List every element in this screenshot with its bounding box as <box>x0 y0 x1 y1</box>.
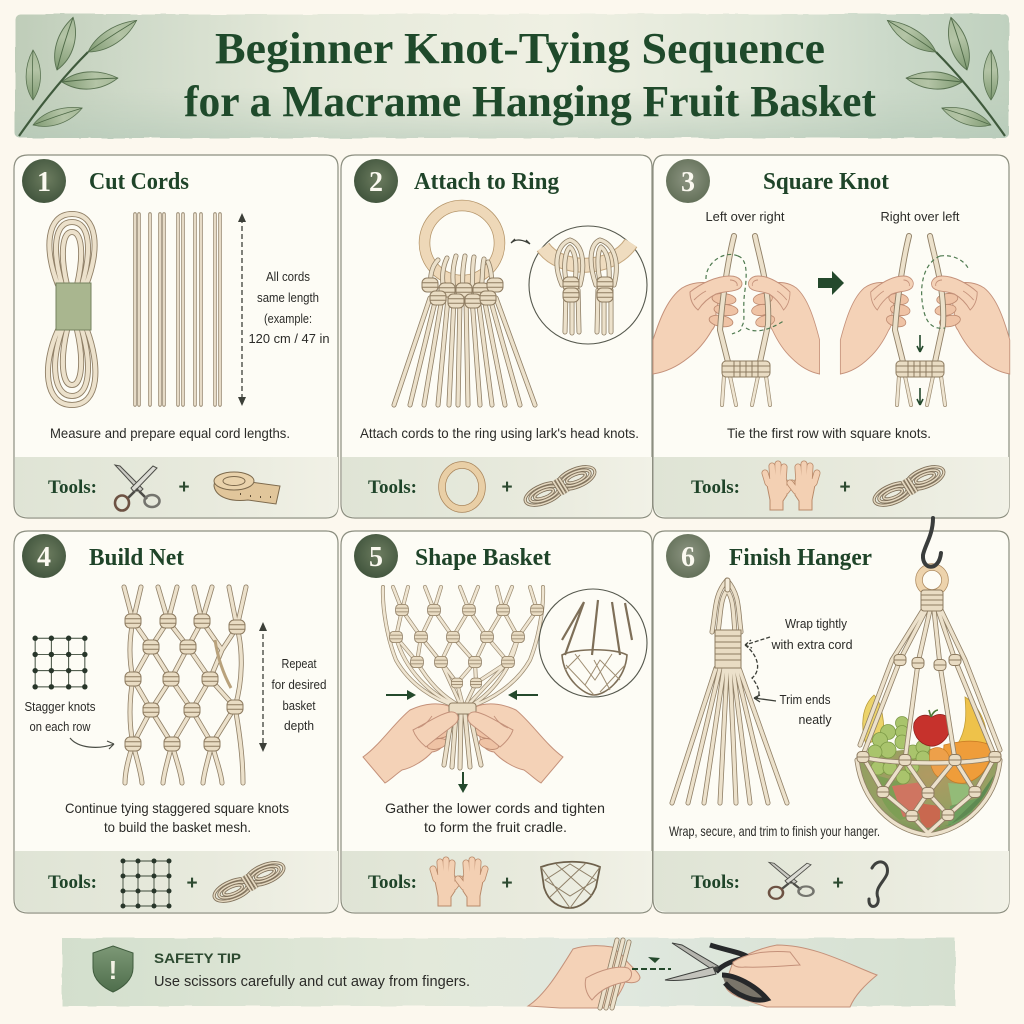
wrapped hanger <box>672 578 787 803</box>
arrow: next <box>818 271 844 295</box>
icon: right leaf branch <box>883 14 1005 136</box>
caption: Continue tying staggered square knots <box>65 800 289 816</box>
depth note: basket <box>282 699 316 713</box>
icon: measuring tape <box>214 472 280 504</box>
number badge: 4 <box>37 542 51 573</box>
cut cords <box>135 214 220 405</box>
tools: Tools: <box>368 477 417 498</box>
number badge <box>22 159 66 203</box>
icon: left leaf branch <box>19 14 141 136</box>
stagger note: Stagger knots <box>24 700 96 714</box>
caption: to build the basket mesh. <box>104 819 251 835</box>
tools <box>691 862 887 906</box>
icon: cord bundle <box>211 858 287 906</box>
arrow: cut direction <box>632 957 671 969</box>
hands <box>363 703 563 783</box>
detail circle: basket <box>539 589 647 697</box>
icon: scissors <box>115 465 160 510</box>
detail magnifier circle <box>529 226 647 344</box>
double arrow <box>511 239 530 244</box>
callout: trim ends: neatly <box>798 713 832 727</box>
icon: hook <box>923 518 941 567</box>
ring with cords <box>394 206 535 405</box>
depth note: Repeat <box>282 657 317 671</box>
tools: Tools: <box>48 477 97 498</box>
safety text: Use scissors carefully and cut away from fingers. <box>154 974 470 990</box>
icon: scissors <box>769 862 814 899</box>
title banner <box>15 14 1009 138</box>
number badge <box>22 534 66 578</box>
illustration: hand holding cord <box>528 940 640 1008</box>
callout: wrap tightly: Wrap tightly <box>785 617 848 631</box>
illustration: hand with scissors <box>665 943 877 1007</box>
callout: trim ends: Trim ends <box>780 693 830 707</box>
curved arrow <box>70 738 114 749</box>
heading: Shape Basket <box>415 545 551 571</box>
depth arrow <box>259 622 267 752</box>
number badge <box>354 534 398 578</box>
panel: step 4 build net <box>14 531 338 913</box>
callout: trim ends <box>754 693 832 727</box>
number badge <box>666 159 710 203</box>
cord coil <box>48 214 95 405</box>
tools band <box>342 851 652 912</box>
number badge <box>354 159 398 203</box>
depth note <box>272 657 327 733</box>
tools: + <box>839 477 851 498</box>
arrow: down <box>458 772 468 793</box>
icon: S hook <box>869 862 887 906</box>
callout: wrap tightly: with extra cord <box>771 638 853 652</box>
caption: Gather the lower cords and tighten <box>385 800 605 816</box>
length note: (example: <box>264 312 312 326</box>
fruit basket <box>857 567 1001 835</box>
caption <box>65 800 289 835</box>
number badge: 3 <box>681 167 695 198</box>
hands tying right over left <box>840 236 1010 405</box>
tools: + <box>501 477 513 498</box>
tools: Tools: <box>48 872 97 893</box>
icon: basket <box>541 862 600 908</box>
number badge: 1 <box>37 167 51 198</box>
depth note: depth <box>284 719 314 733</box>
icon: cord bundle <box>871 462 947 510</box>
tools: + <box>501 873 513 894</box>
tools: Tools: <box>368 872 417 893</box>
tools band <box>654 851 1009 912</box>
caption: to form the fruit cradle. <box>424 819 567 835</box>
icon: hands <box>765 464 817 510</box>
tools: + <box>186 873 198 894</box>
number badge <box>666 534 710 578</box>
number badge: 5 <box>369 542 383 573</box>
icon: wooden ring <box>442 465 482 509</box>
title: for a Macrame Hanging Fruit Basket <box>184 77 876 126</box>
heading: Build Net <box>89 545 184 571</box>
tools band <box>342 457 652 517</box>
tools <box>368 462 598 510</box>
gathered mesh <box>383 587 543 706</box>
panel: step 5 shape basket <box>341 531 652 913</box>
tools: + <box>832 873 844 894</box>
caption: Measure and prepare equal cord lengths. <box>50 425 290 441</box>
number badge: 6 <box>681 542 695 573</box>
tools: + <box>178 477 190 498</box>
safety tip banner <box>62 938 955 1008</box>
labels <box>706 210 960 224</box>
arrows: gather <box>386 690 538 700</box>
icon: hands <box>433 860 485 906</box>
stagger note: on each row <box>30 720 91 734</box>
icon: cord bundle <box>522 462 598 510</box>
hands tying left over right <box>653 236 820 405</box>
number badge: 2 <box>369 167 383 198</box>
depth note: for desired <box>272 678 327 692</box>
stagger note <box>24 700 96 734</box>
caption: Attach cords to the ring using lark's head knots. <box>360 425 639 441</box>
tools band <box>15 851 338 912</box>
tools: Tools: <box>691 477 740 498</box>
length note <box>248 270 330 346</box>
caption: Wrap, secure, and trim to finish your hanger. <box>669 823 880 839</box>
heading: Cut Cords <box>89 169 189 195</box>
panel: step 3 square knot <box>653 155 1010 518</box>
tools band <box>654 457 1009 517</box>
tools <box>48 858 287 908</box>
icon: net grid <box>120 858 172 908</box>
icon: shield: ! <box>109 955 117 985</box>
tools band <box>15 457 338 517</box>
title: Beginner Knot-Tying Sequence <box>215 24 825 73</box>
tools <box>368 860 600 908</box>
length note: 120 cm / 47 in <box>248 332 330 346</box>
tools <box>48 465 280 510</box>
length note: same length <box>257 291 319 305</box>
knot mesh <box>124 587 246 783</box>
heading: Square Knot <box>763 169 889 195</box>
labels: Left over right <box>706 210 785 224</box>
panel: step 2 attach to ring <box>341 155 652 518</box>
fruit <box>857 695 1000 835</box>
heading: Attach to Ring <box>414 169 559 195</box>
safety heading: SAFETY TIP <box>154 950 241 966</box>
dimension arrow <box>238 213 246 406</box>
heading: Finish Hanger <box>729 545 872 571</box>
tools: Tools: <box>691 872 740 893</box>
length note: All cords <box>266 270 310 284</box>
stagger grid <box>32 636 88 690</box>
labels: Right over left <box>880 210 960 224</box>
icon: shield <box>93 946 133 992</box>
callout: wrap tightly <box>745 617 853 698</box>
panel: step 6 finish hanger <box>653 518 1009 913</box>
panel: step 1 cut cords <box>14 155 338 518</box>
caption <box>385 800 605 835</box>
tools <box>691 462 947 510</box>
caption: Tie the first row with square knots. <box>727 425 931 441</box>
